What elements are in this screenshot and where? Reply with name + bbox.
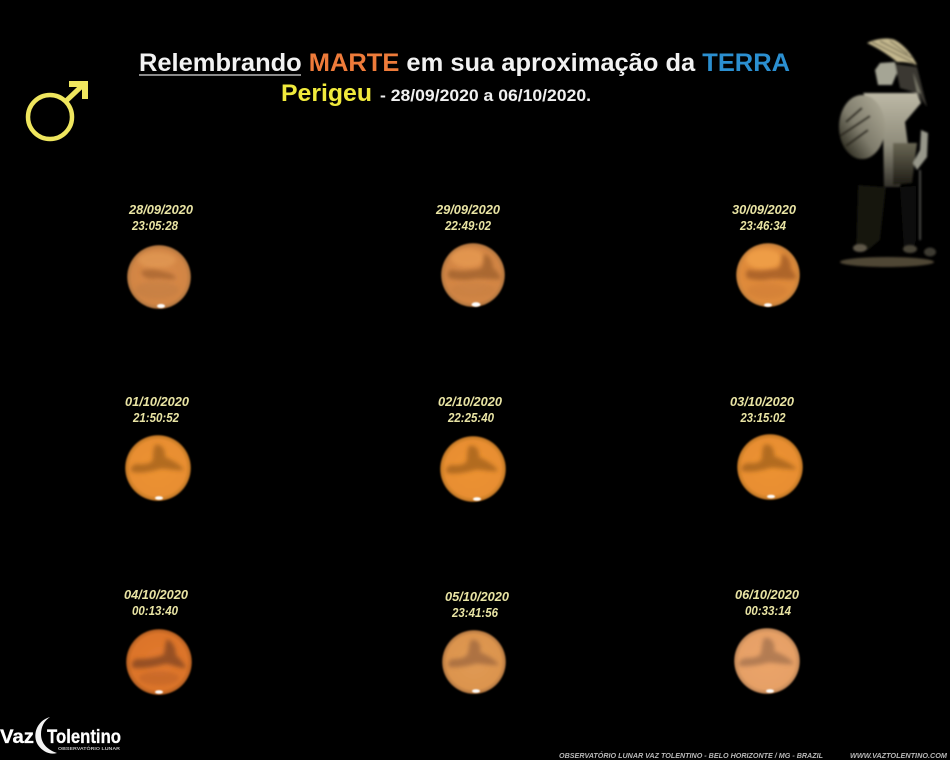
panel: 03/10/2020: 23:15:02 — [740, 410, 786, 425]
panel: 01/10/2020: 21:50:52 — [132, 410, 179, 425]
panel: 02/10/2020 — [438, 394, 506, 502]
panel: 29/09/2020 — [435, 202, 505, 307]
icon: Mars symbol — [28, 84, 85, 139]
panel: 06/10/2020 — [734, 587, 800, 694]
planet photo — [442, 630, 506, 694]
panel: 01/10/2020: 01/10/2020 — [125, 394, 189, 409]
panel: 30/09/2020: 23:46:34 — [739, 218, 786, 233]
panel: 06/10/2020: 06/10/2020 — [735, 587, 799, 602]
panel: 30/09/2020: 30/09/2020 — [732, 202, 796, 217]
panel: 06/10/2020: 00:33:14 — [745, 603, 791, 618]
planet photo — [127, 245, 191, 309]
panel: 03/10/2020 — [730, 394, 803, 500]
panel: 05/10/2020: 23:41:56 — [451, 605, 499, 620]
logo: Vaz Tolentino observatory — [0, 717, 121, 754]
icon: Mars warrior statue — [839, 39, 936, 267]
subtitle: - 28/09/2020 a 06/10/2020. — [380, 87, 591, 105]
footer website: WWW.VAZTOLENTINO.COM — [850, 753, 947, 760]
planet photo — [737, 434, 803, 500]
statue legs — [856, 185, 916, 250]
planet photo — [126, 629, 192, 695]
panel: 01/10/2020 — [125, 394, 191, 501]
panel: 30/09/2020 — [732, 202, 800, 307]
panel: 04/10/2020: 00:13:40 — [132, 603, 178, 618]
planet photo — [125, 435, 191, 501]
logo: Vaz Tolentino observatory: Tolentino — [47, 727, 121, 748]
logo: Vaz Tolentino observatory: Vaz — [0, 727, 34, 748]
panel: 29/09/2020: 22:49:02 — [444, 218, 491, 233]
panel: 28/09/2020: 28/09/2020 — [128, 202, 193, 217]
panel: 04/10/2020: 04/10/2020 — [124, 587, 188, 602]
panel: 28/09/2020 — [127, 202, 193, 309]
panel: 05/10/2020: 05/10/2020 — [445, 589, 509, 604]
statue body — [839, 39, 936, 256]
panel: 03/10/2020: 03/10/2020 — [730, 394, 794, 409]
subtitle — [281, 80, 591, 107]
panel: 28/09/2020: 23:05:28 — [131, 218, 179, 233]
panel: 02/10/2020: 22:25:40 — [447, 410, 494, 425]
planet photo — [736, 243, 800, 307]
planet photo — [441, 243, 505, 307]
title: Relembrando MARTE em sua aproximação da TERRA — [139, 49, 790, 77]
logo: Vaz Tolentino observatory: OBSERVATÓRIO LUNAR — [58, 744, 121, 751]
subtitle: Perigeu — [281, 80, 372, 107]
panel: 05/10/2020 — [442, 589, 509, 694]
panel: 04/10/2020 — [124, 587, 192, 695]
planet photo — [734, 628, 800, 694]
panel: 02/10/2020: 02/10/2020 — [438, 394, 502, 409]
panel: 29/09/2020: 29/09/2020 — [435, 202, 500, 217]
footer credit: OBSERVATÓRIO LUNAR VAZ TOLENTINO - BELO HORIZONTE / MG - BRAZIL — [559, 751, 823, 760]
planet photo — [440, 436, 506, 502]
